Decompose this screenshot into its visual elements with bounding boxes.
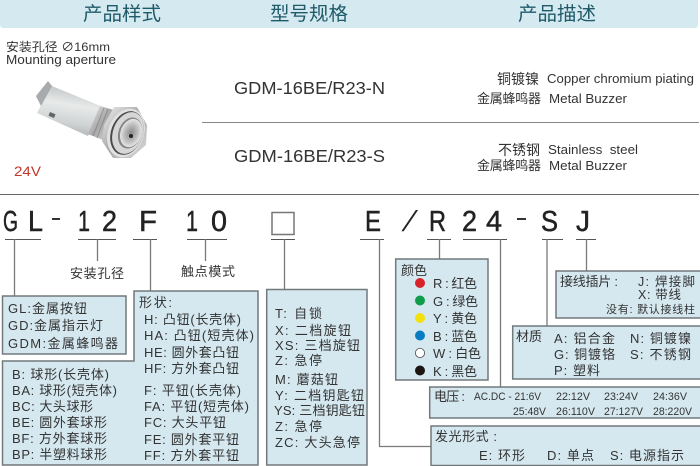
panel: material: A: 铝合金: [554, 331, 615, 346]
panel: colours: K : 黑色: [433, 364, 477, 379]
panel: function types: Z: 急停: [275, 353, 322, 368]
panel: lighting form: E: 环形: [479, 448, 525, 463]
model code letters: R: [429, 206, 446, 238]
icon: red dot: [415, 278, 425, 288]
model code letters: G: [3, 206, 18, 238]
panel: voltage: 25:48V: [513, 406, 547, 418]
label: aperture: 安装孔径: [70, 266, 124, 281]
panel: shapes: FF: 方外套平钮: [144, 448, 239, 463]
panel: GL type: GDM:金属蜂鸣器: [8, 336, 118, 351]
panel: lighting form: [431, 426, 700, 466]
model code letters: 1: [78, 206, 90, 238]
panel: voltage: 24:36V: [653, 391, 688, 403]
panel: shapes: [2, 291, 258, 465]
panel: shapes: HA: 凸钮(短壳体): [144, 328, 254, 343]
panel: colours: R : 红色: [433, 276, 477, 291]
description: copper plating: Copper chromium piating: [547, 71, 694, 86]
heading: model spec: 型号规格: [270, 3, 348, 25]
panel: shapes: HF: 方外套凸钮: [144, 361, 239, 376]
panel: terminals: X: 带线: [638, 288, 681, 302]
panel: shapes: BF: 方外套球形: [12, 431, 107, 446]
model code letters: /: [399, 206, 420, 238]
panel: shapes: H: 凸钮(长壳体): [144, 312, 241, 327]
panel: shapes: BA: 球形(短壳体): [12, 383, 117, 398]
model: GDM-16BE/R23-N: GDM-16BE/R23-N: [234, 78, 385, 98]
panel: function types: YS: 三档钥匙钮: [274, 403, 365, 418]
panel: shapes: BE: 圆外套球形: [12, 415, 107, 430]
model code letters: S: [541, 206, 558, 238]
panel: shapes: BC: 大头球形: [12, 399, 93, 414]
panel: shapes: 形状:: [139, 295, 172, 310]
panel: function types: ZC: 大头急停: [275, 435, 360, 450]
panel: shapes: B: 球形(长壳体): [12, 367, 109, 382]
description: stainless steel: 不锈钢: [498, 142, 540, 158]
panel: lighting form: 发光形式 :: [435, 429, 497, 444]
voltage label: 24V: [14, 163, 42, 179]
icon: white dot: [415, 348, 425, 358]
panel: shapes: FA: 平钮(短壳体): [144, 399, 249, 414]
model: GDM-16BE/R23-S: GDM-16BE/R23-S: [234, 146, 385, 166]
panel: function types: XS: 三档旋钮: [275, 338, 360, 353]
panel: function types: T: 自锁: [275, 306, 322, 321]
model code letters: 2: [462, 206, 477, 238]
panel: lighting form: D: 单点: [547, 448, 594, 463]
heading: product description: 产品描述: [518, 3, 596, 25]
model code letters: 1: [186, 206, 198, 238]
panel: material: 材质: [516, 329, 542, 344]
panel: material: S: 不锈钢: [630, 347, 691, 362]
icon: product photo of metal buzzer: [36, 81, 151, 163]
model code letters: [3, 206, 590, 238]
icon: yellow dot: [415, 313, 425, 323]
description: copper plating: 金属蜂鸣器: [477, 91, 541, 106]
mounting aperture text: 安装孔径 ∅16mm: [6, 39, 110, 54]
panel: material: [513, 326, 700, 379]
mounting aperture text: Mounting aperture: [6, 53, 116, 67]
panel: material: N: 铜镀镍: [630, 331, 691, 346]
panel: GL type: GD:金属指示灯: [8, 318, 103, 333]
description: stainless steel: [477, 142, 638, 173]
description: copper plating: [477, 71, 694, 106]
panel: GL type: GL:金属按钮: [8, 301, 87, 316]
model code letters: F: [139, 206, 157, 238]
panel: function types: M: 蘑菇钮: [275, 372, 338, 387]
header band: [0, 0, 698, 28]
panel: voltage: AC.DC - 21:6V: [474, 391, 542, 403]
description: stainless steel: Metal Buzzer: [549, 158, 628, 173]
panel: GL type: [2, 296, 126, 354]
panel: shapes: FE: 圆外套平钮: [144, 432, 239, 447]
panel: voltage: 26:110V: [556, 406, 596, 418]
description: stainless steel: 金属蜂鸣器: [477, 158, 541, 173]
model code letters: 0: [211, 206, 227, 238]
code underlines: [5, 238, 596, 240]
heading: product style: 产品样式: [83, 3, 161, 25]
panel: shapes: F: 平钮(长壳体): [144, 383, 241, 398]
leader lines: [14, 239, 586, 446]
panel: shapes: FC: 大头平钮: [144, 415, 226, 430]
model code letters: 4: [486, 206, 502, 238]
panel: colours: W : 白色: [433, 346, 481, 361]
panel: terminals: 没有: 默认接线柱: [606, 302, 695, 316]
icon: blue dot: [415, 330, 425, 340]
model code letters: E: [365, 206, 381, 238]
panel: terminals: [556, 271, 700, 318]
panel: colours: B : 蓝色: [433, 329, 477, 344]
panel: shapes: BP: 半塑料球形: [12, 447, 107, 462]
panel: colours: 颜色: [401, 263, 427, 278]
panel: colours: [396, 259, 488, 380]
panel: function types: X: 二档旋钮: [275, 323, 351, 338]
icon: green dot: [415, 296, 425, 306]
panel: colours: Y : 黄色: [433, 311, 477, 326]
panel: voltage: 22:12V: [556, 391, 591, 403]
panel: lighting form: S: 电源指示: [610, 448, 684, 463]
mounting aperture text: [6, 39, 116, 67]
description: stainless steel: Stainless steel: [548, 142, 638, 157]
panel: shapes: HE: 圆外套凸钮: [144, 345, 239, 360]
panel: material: G: 铜镀铬: [554, 347, 615, 362]
panel: function types: [267, 290, 367, 465]
panel: voltage: 28:220V: [653, 406, 693, 418]
panel: function types: Z: 急停: [275, 419, 322, 434]
panel: voltage: [430, 387, 700, 418]
panel: terminals: 接线插片 :: [560, 274, 618, 289]
icon: black dot: [415, 366, 425, 376]
model code letters: L: [28, 206, 43, 238]
label: contact mode: 触点模式: [181, 264, 235, 279]
panel: terminals: J: 焊接脚: [638, 274, 695, 289]
model code letters: 2: [102, 206, 117, 238]
panel: function types: Y: 二档钥匙钮: [275, 388, 364, 403]
description: copper plating: 铜镀镍: [497, 71, 539, 87]
panel: colours: G : 绿色: [433, 294, 478, 309]
description: copper plating: Metal Buzzer: [549, 91, 628, 106]
panel: voltage: 23:24V: [604, 391, 639, 403]
panel: material: P: 塑料: [554, 363, 600, 378]
model code letters: J: [576, 206, 590, 238]
panel: voltage: 27:127V: [604, 406, 644, 418]
panel: voltage: 电压 :: [434, 389, 465, 404]
